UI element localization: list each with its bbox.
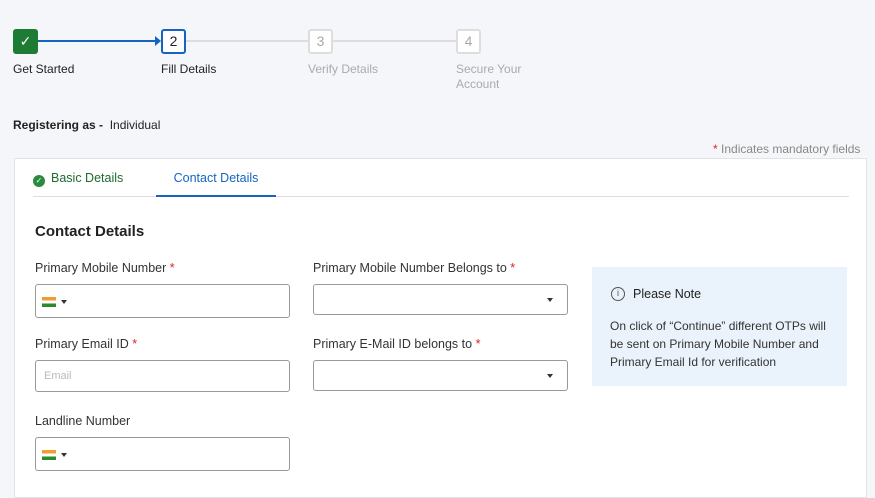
mandatory note: * Indicates mandatory fields [713,142,860,156]
step 1: ✓ [20,33,31,49]
stepper: Get Started [13,62,74,76]
field email [35,337,290,392]
tab contact [156,171,276,197]
field email: Email [44,370,72,382]
field landline: Landline Number [35,414,130,428]
icon info [611,287,625,301]
note box: On click of “Continue” different OTPs will be sent on Primary Mobile Number and Primary Email Id for verification [610,319,826,369]
step 3: 3 [317,33,324,49]
registering as: Registering as - Individual [13,118,160,132]
field email: Primary Email ID * [35,337,137,351]
note box: Please Note [633,287,701,301]
stepper: Account [456,77,499,91]
note box [592,267,847,386]
stepper [13,29,522,91]
stepper: Fill Details [161,62,216,76]
stepper: Verify Details [308,62,378,76]
tabs [33,159,849,197]
step 2 [161,29,186,54]
tab basic: Basic Details [51,171,123,185]
step 1 [13,29,38,54]
field landline [35,414,290,471]
card [14,158,867,498]
step 4 [456,29,481,54]
tab basic: ✓ [36,176,42,185]
field mobile belongs: Primary Mobile Number Belongs to * [313,261,515,275]
step 4: 4 [465,33,472,49]
tab contact: Contact Details [174,171,258,185]
step 3 [308,29,333,54]
field email belongs: Primary E-Mail ID belongs to * [313,337,480,351]
step 2: 2 [170,33,177,49]
field mobile [35,261,290,318]
heading: Contact Details [35,223,144,240]
icon info: i [617,288,619,298]
field mobile: Primary Mobile Number * [35,261,175,275]
stepper: Secure Your [456,62,521,76]
